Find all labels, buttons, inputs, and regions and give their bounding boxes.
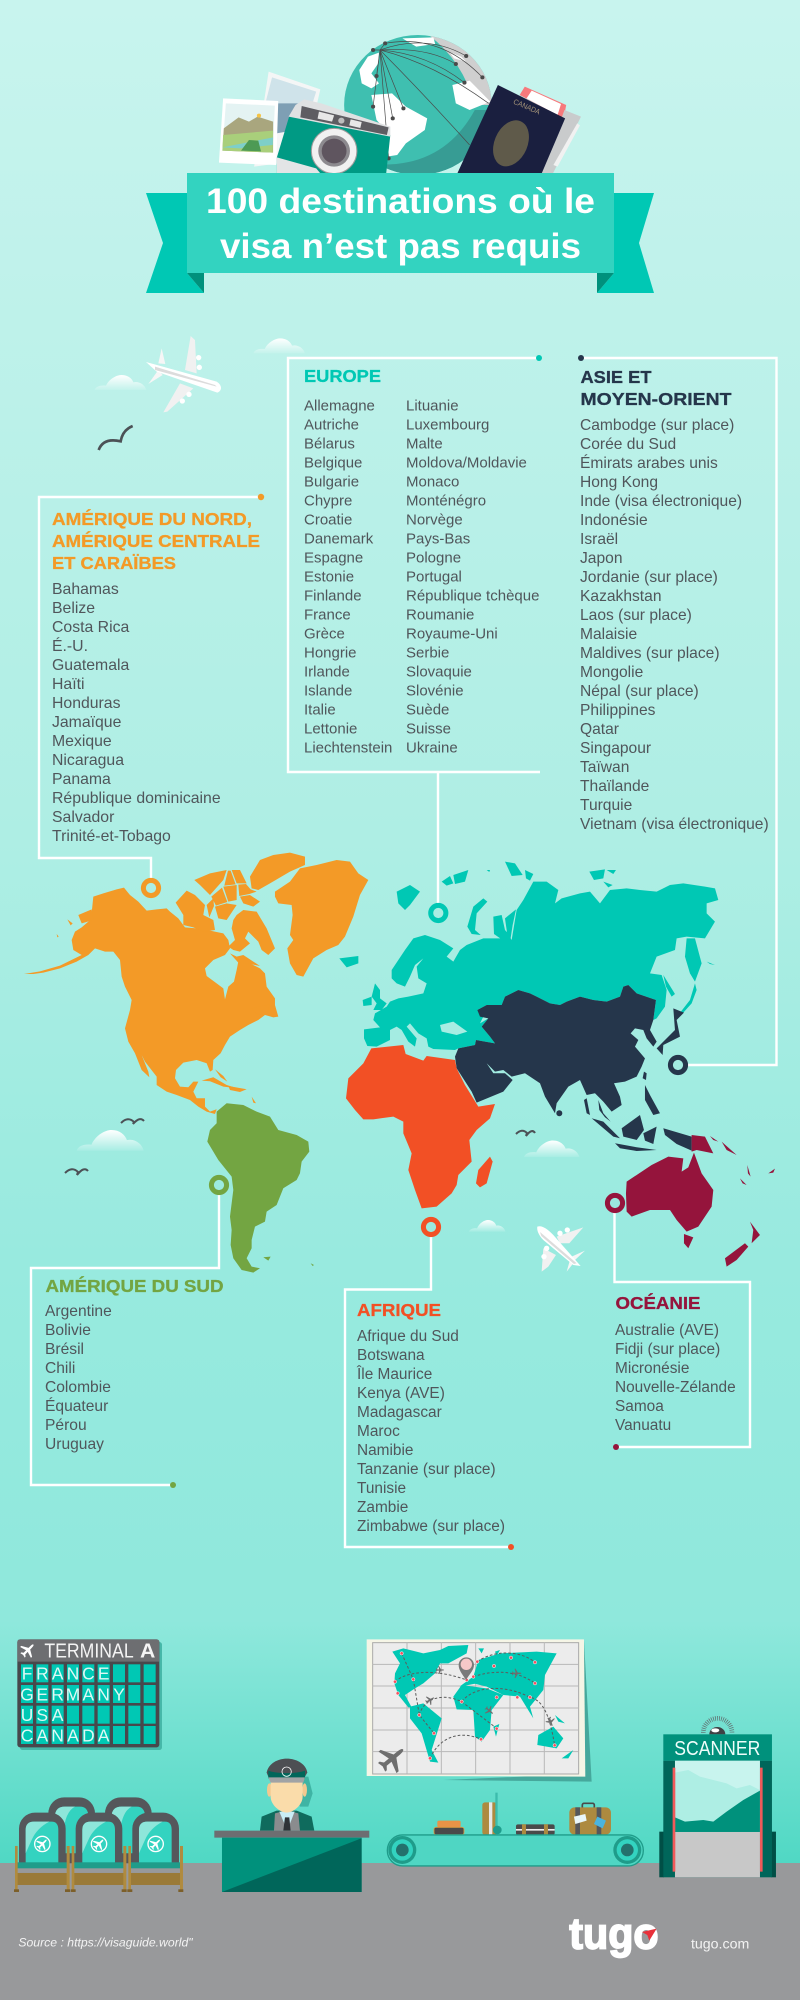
heading: AMÉRIQUE CENTRALE: [52, 530, 260, 551]
icon: cloud: [77, 1130, 144, 1151]
ring marker: [670, 1057, 686, 1073]
region: Africa: [346, 1045, 495, 1208]
country list column 2: Roumanie: [406, 606, 474, 624]
scanner label: SCANNER: [674, 1737, 760, 1760]
waiting chairs: [14, 1797, 183, 1892]
country list: Samoa: [615, 1398, 664, 1415]
board destinations: E: [37, 1684, 48, 1704]
connector: [581, 358, 776, 1065]
icon: bird: [516, 1131, 535, 1136]
connector: [288, 358, 540, 903]
country list column 2: Lituanie: [406, 398, 459, 414]
heading: EUROPE: [304, 366, 381, 386]
country list: Bolivie: [45, 1322, 91, 1339]
region: Great Britain: [372, 983, 387, 1010]
country list column 2: Slovaquie: [406, 664, 472, 680]
country list: Kenya (AVE): [357, 1385, 445, 1402]
country list: Nouvelle-Zélande: [615, 1379, 736, 1396]
country list column 2: Monaco: [406, 474, 459, 490]
country list: Chili: [45, 1360, 75, 1377]
title: visa n’est pas requis: [220, 227, 581, 266]
country list: Namibie: [357, 1442, 413, 1459]
country list column 2: Pays-Bas: [406, 530, 470, 548]
country list: Tanzanie (sur place): [357, 1461, 496, 1478]
board destinations: C: [21, 1725, 33, 1745]
country list: Malaisie: [580, 626, 637, 643]
icon: bird: [65, 1169, 88, 1175]
country list column 1: Belgique: [304, 454, 362, 472]
country list column 1: Autriche: [304, 416, 359, 434]
country list column 1: Croatie: [304, 512, 352, 528]
dot: [170, 1482, 176, 1488]
country list: Fidji (sur place): [615, 1341, 720, 1358]
board cells: [21, 1664, 156, 1744]
country list: Laos (sur place): [580, 607, 692, 624]
ring marker: [211, 1177, 227, 1193]
ring marker: [431, 905, 446, 921]
country list: Maroc: [357, 1423, 400, 1440]
icon: phone and ticket: [520, 87, 581, 177]
conveyor belt with luggage: [387, 1793, 643, 1866]
callout: Oceania: [607, 1195, 750, 1450]
icon: front photo: [219, 98, 278, 165]
country list: Équateur: [45, 1396, 108, 1415]
title banner: [146, 173, 654, 293]
icon: passport: [456, 85, 565, 177]
region: Oceania: [626, 1135, 775, 1267]
country list: Indonésie: [580, 512, 648, 529]
country list: Népal (sur place): [580, 683, 699, 700]
country list: Micronésie: [615, 1360, 689, 1377]
country list column 1: Grèce: [304, 626, 345, 642]
country list: Afrique du Sud: [357, 1328, 459, 1345]
ribbon left tail: [146, 193, 204, 293]
country list column 2: Suisse: [406, 720, 451, 738]
country list: Qatar: [580, 721, 619, 738]
heading: AMÉRIQUE DU NORD,: [52, 508, 252, 529]
country list column 2: Ukraine: [406, 740, 458, 756]
callout: Asia and Middle East: [578, 355, 776, 1073]
country list: Australie (AVE): [615, 1322, 719, 1339]
luggage: [437, 1821, 461, 1827]
country list: Belize: [52, 600, 95, 617]
country list column 2: Monténégro: [406, 492, 486, 510]
country list: Inde (visa électronique): [580, 493, 742, 510]
region: Ireland: [363, 997, 372, 1006]
country list: Costa Rica: [52, 619, 129, 636]
callout: South America: [31, 1177, 227, 1488]
country list: Uruguay: [45, 1436, 104, 1453]
board destinations: Y: [113, 1684, 125, 1704]
country list column 2: Royaume-Uni: [406, 626, 498, 642]
security scanner: [659, 1718, 776, 1877]
country list: Hong Kong: [580, 474, 658, 491]
country list: Madagascar: [357, 1404, 442, 1421]
region: Europe and Russia: [339, 862, 718, 1050]
country list column 2: Portugal: [406, 568, 462, 586]
icon: bird: [121, 1119, 144, 1124]
country list column 2: Pologne: [406, 550, 461, 566]
country list: É.-U.: [52, 636, 88, 655]
board destinations: A: [83, 1684, 95, 1704]
terminal scene left: [14, 1639, 369, 1950]
board destinations: S: [37, 1705, 48, 1725]
country list: Jordanie (sur place): [580, 569, 718, 586]
country list: Nicaragua: [52, 752, 124, 769]
ring marker: [423, 1219, 439, 1235]
country list column 2: Luxembourg: [406, 416, 489, 434]
region: Greenland: [275, 860, 368, 977]
heading: AMÉRIQUE DU SUD: [46, 1275, 224, 1296]
country list: Émirats arabes unis: [580, 453, 718, 472]
floor: [0, 1863, 800, 2000]
icon: cloud: [469, 1220, 506, 1232]
country list: Mongolie: [580, 664, 643, 681]
board destinations: N: [97, 1684, 110, 1704]
country list column 2: Malte: [406, 436, 443, 452]
ring marker: [607, 1195, 623, 1211]
country list: Colombie: [45, 1379, 111, 1396]
country list: Corée du Sud: [580, 436, 676, 453]
icon: cloud: [253, 338, 305, 353]
country list column 1: Islande: [304, 682, 352, 700]
country list: Maldives (sur place): [580, 645, 720, 662]
connector: [39, 497, 261, 878]
region: Iceland: [339, 956, 358, 967]
callout: Europe: [288, 355, 542, 921]
ribbon right tail: [597, 193, 654, 293]
country list: Kazakhstan: [580, 588, 662, 605]
country list column 2: Suède: [406, 702, 449, 718]
country list column 1: Irlande: [304, 664, 350, 680]
icon: airplane: [537, 1226, 585, 1272]
terminal scene right: [367, 1639, 776, 1958]
board destinations: G: [20, 1684, 34, 1704]
country list: Israël: [580, 531, 618, 548]
country list column 2: Moldova/Moldavie: [406, 454, 527, 472]
ring marker: [143, 880, 159, 896]
board destinations: N: [67, 1664, 79, 1684]
region: South America: [207, 1103, 314, 1273]
region: North America: [24, 853, 368, 1114]
connector: [614, 1213, 750, 1447]
title: 100 destinations où le: [206, 182, 595, 221]
country list: Vanuatu: [615, 1417, 671, 1434]
country list column 1: Danemark: [304, 530, 374, 548]
wall map: [367, 1639, 592, 1782]
board destinations: E: [98, 1664, 109, 1684]
country list column 1: Finlande: [304, 588, 362, 604]
dot: [613, 1444, 619, 1450]
source: Source : https://visaguide.world": [18, 1936, 193, 1950]
country list: Turquie: [580, 797, 632, 814]
region: Asia and Middle East: [455, 985, 692, 1151]
country list column 1: Espagne: [304, 550, 363, 566]
country list: Cambodge (sur place): [580, 417, 734, 434]
heading: MOYEN-ORIENT: [580, 389, 732, 409]
country list: Zimbabwe (sur place): [357, 1518, 505, 1535]
country list: Honduras: [52, 695, 121, 712]
header illustration: travel objects: [219, 30, 581, 180]
country list column 1: Liechtenstein: [304, 740, 392, 756]
callout: Africa: [345, 1219, 514, 1550]
connector: [345, 1237, 511, 1547]
country list: Taïwan: [580, 759, 629, 776]
board destinations: C: [82, 1664, 95, 1684]
board destinations: A: [52, 1664, 64, 1684]
country list column 1: Allemagne: [304, 398, 375, 414]
departures board: [17, 1639, 162, 1750]
icon: cloud: [95, 375, 146, 390]
country list: Haïti: [52, 676, 84, 693]
country list column 1: Estonie: [304, 568, 354, 586]
country list: Salvador: [52, 809, 114, 826]
board destinations: [20, 1664, 125, 1745]
board destinations: R: [36, 1664, 49, 1684]
heading: ET CARAÏBES: [52, 553, 176, 573]
heading: AFRIQUE: [357, 1300, 441, 1320]
board title: A: [140, 1639, 155, 1662]
icon: airplane: [146, 336, 221, 412]
board destinations: D: [82, 1725, 95, 1745]
officer at desk: [214, 1759, 369, 1892]
board destinations: M: [66, 1684, 80, 1704]
icon: cloud: [524, 1140, 580, 1157]
country list column 1: Bélarus: [304, 436, 355, 452]
country list column 1: France: [304, 606, 351, 624]
country list: Guatemala: [52, 657, 129, 674]
country list: Trinité-et-Tobago: [52, 828, 171, 845]
world map: [24, 853, 775, 1273]
country list column 1: Bulgarie: [304, 474, 359, 490]
country list: Île Maurice: [356, 1366, 432, 1383]
country list: Panama: [52, 771, 111, 788]
country list: Singapour: [580, 740, 651, 757]
country list: Argentine: [45, 1303, 112, 1320]
country list: Vietnam (visa électronique): [580, 816, 769, 833]
decorative sky top: [95, 336, 305, 450]
country list column 1: Hongrie: [304, 644, 357, 662]
board destinations: A: [67, 1725, 79, 1745]
board destinations: A: [52, 1705, 64, 1725]
country list column 2: Norvège: [406, 512, 463, 528]
icon: back photo: [254, 72, 320, 167]
board destinations: R: [51, 1684, 64, 1704]
country list: Mexique: [52, 733, 112, 750]
icon: bird: [99, 426, 133, 450]
country list column 2: Slovénie: [406, 682, 464, 700]
country list: Brésil: [45, 1341, 84, 1358]
country list: Jamaïque: [52, 714, 122, 731]
country list column 2: République tchèque: [406, 588, 539, 604]
country list: Botswana: [357, 1347, 425, 1364]
country list: Japon: [580, 550, 622, 567]
board title: TERMINAL: [44, 1640, 134, 1662]
heading: ASIE ET: [580, 367, 652, 387]
icon: pin: [459, 1657, 474, 1680]
callout: North America: [39, 494, 264, 896]
country list column 1: Lettonie: [304, 720, 357, 738]
country list column 1: Chypre: [304, 492, 352, 510]
country list: Thaïlande: [580, 778, 649, 795]
country list column 1: Italie: [304, 702, 336, 718]
icon: plane: [17, 1639, 39, 1661]
board destinations: U: [21, 1705, 33, 1725]
board destinations: A: [98, 1725, 110, 1745]
dot: [508, 1544, 514, 1550]
board destinations: F: [22, 1664, 32, 1684]
icon: camera: [277, 99, 390, 177]
dot: [578, 355, 584, 361]
country list: Zambie: [357, 1499, 408, 1516]
icon: passport: CANADA: [512, 98, 542, 117]
tugo logo: tugo: [569, 1909, 659, 1958]
dot: [536, 355, 542, 361]
board destinations: N: [51, 1725, 64, 1745]
country list: Pérou: [45, 1417, 87, 1434]
connector: [31, 1195, 219, 1485]
website: tugo.com: [691, 1936, 749, 1951]
country list: Tunisie: [357, 1480, 406, 1497]
country list column 2: Serbie: [406, 644, 449, 662]
decorative sky around the map: [65, 1119, 585, 1272]
country list: Philippines: [580, 702, 656, 719]
country list: Bahamas: [52, 581, 119, 598]
heading: OCÉANIE: [616, 1292, 700, 1313]
board destinations: A: [37, 1725, 49, 1745]
dot: [258, 494, 264, 500]
country list: République dominicaine: [52, 790, 221, 807]
icon: globe: [344, 35, 492, 173]
